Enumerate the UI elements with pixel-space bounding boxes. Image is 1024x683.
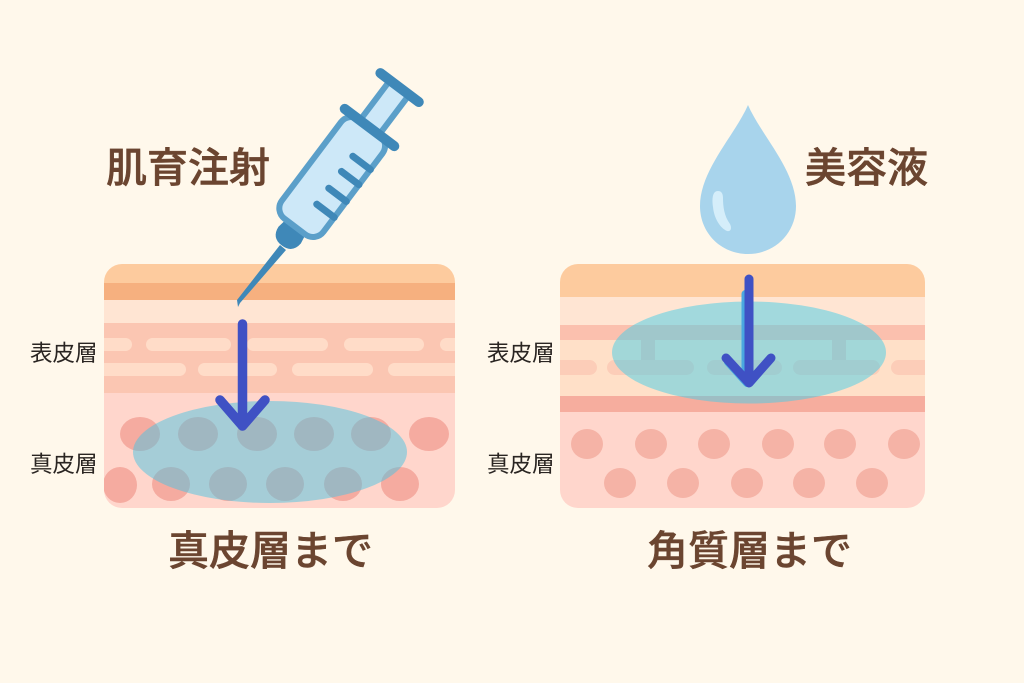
label: 真皮層 left: 真皮層 (30, 452, 98, 477)
penetration zone: dermis (133, 401, 407, 503)
penetration zone: stratum corneum (612, 302, 886, 404)
heading: 肌育注射: 肌育注射 (106, 145, 270, 191)
arrow: down to dermis (220, 324, 265, 426)
label: 表皮層 right: 表皮層 (487, 341, 555, 366)
icon: syringe (237, 62, 431, 307)
heading: 美容液: 美容液 (805, 145, 928, 191)
caption: 角質層まで: 角質層まで (647, 528, 852, 574)
panel: skin cross-section, injection (90, 264, 470, 508)
panel: skin cross-section, serum (550, 264, 936, 508)
label: 真皮層 right: 真皮層 (487, 452, 555, 477)
label: 表皮層 left: 表皮層 (30, 341, 98, 366)
caption: 真皮層まで: 真皮層まで (168, 528, 373, 574)
icon: water drop (700, 105, 796, 254)
arrow: down into stratum corneum (726, 279, 771, 383)
